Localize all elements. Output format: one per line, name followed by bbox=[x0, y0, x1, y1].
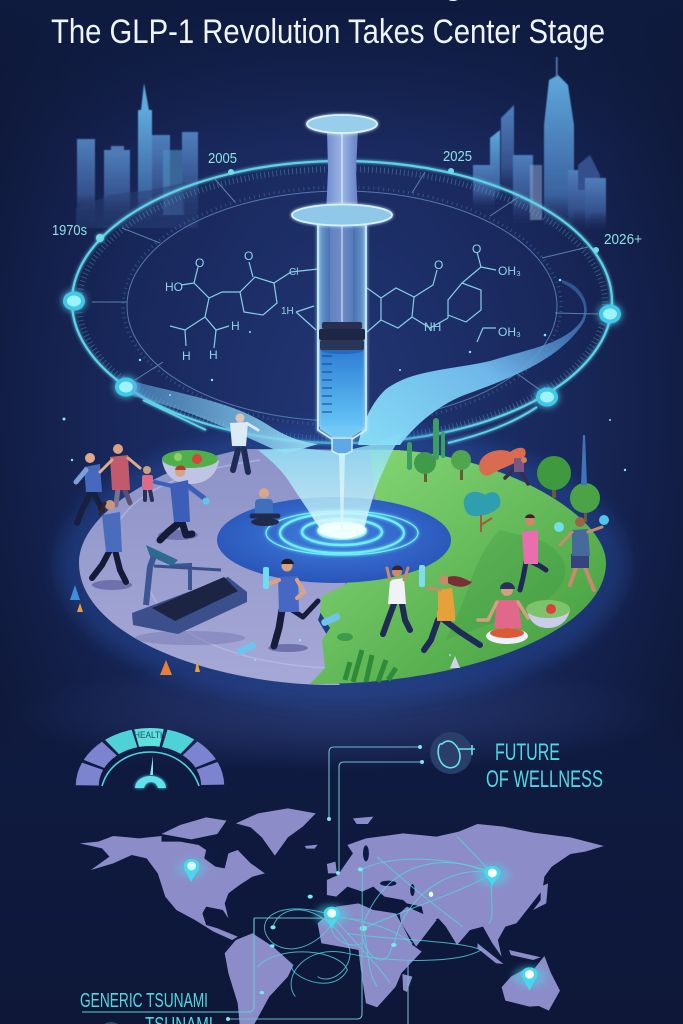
heading: future of wellness: FUTURE bbox=[495, 739, 560, 766]
small figures near liver bbox=[505, 457, 528, 484]
light funnel flowing into the pool bbox=[258, 430, 407, 539]
central pool with glowing rings bbox=[217, 497, 451, 583]
molecule diagram bbox=[165, 242, 521, 363]
title bbox=[51, 0, 605, 51]
molecule diagram: HO bbox=[165, 280, 183, 294]
molecule diagram: H bbox=[231, 319, 240, 333]
liquid ribbon: right bbox=[358, 280, 587, 445]
city skyline: right bbox=[473, 57, 606, 230]
map pins bbox=[177, 858, 546, 991]
molecule diagram: H bbox=[209, 348, 218, 362]
liquid ribbon: left bbox=[132, 381, 537, 454]
syringe rubber stopper bbox=[319, 322, 365, 350]
traffic cones bbox=[70, 585, 460, 675]
timeline year labels: 2005 bbox=[208, 151, 237, 167]
person: woman with wellness orbs bbox=[554, 515, 609, 590]
generic tsunami label: GENERIC TSUNAMI bbox=[80, 990, 208, 1012]
molecule diagram: OH₃ bbox=[498, 264, 521, 278]
person: white top at rear bbox=[230, 414, 258, 472]
world map bbox=[80, 808, 604, 1024]
person: red striped top bbox=[100, 444, 140, 505]
person: center runner bbox=[263, 559, 318, 652]
future of wellness icon bbox=[430, 732, 475, 774]
person: walker in blue with ponytail bbox=[92, 500, 132, 590]
trees and park scenery bbox=[337, 418, 600, 682]
syringe barrel bbox=[318, 222, 366, 439]
timeline year labels: 2025 bbox=[443, 149, 472, 165]
timeline year labels: 1970s bbox=[52, 223, 87, 239]
molecule diagram: O bbox=[244, 249, 253, 263]
molecule diagram: Cl bbox=[289, 267, 298, 278]
title: The GLP-1 Revolution Takes Center Stage bbox=[51, 13, 605, 51]
treadmill bbox=[132, 545, 247, 645]
heading: future of wellness: OF WELLNESS bbox=[486, 766, 603, 793]
health gauge: HEALTH bbox=[134, 730, 166, 741]
people on gray side bbox=[76, 414, 318, 652]
syringe bbox=[292, 115, 392, 530]
molecule diagram: O bbox=[472, 242, 481, 256]
continents bbox=[80, 808, 604, 1024]
salad bowl and plate: right bbox=[486, 600, 570, 644]
scattered sparkles bbox=[62, 279, 626, 661]
molecule diagram: O bbox=[434, 258, 443, 272]
salad bowl: top bbox=[162, 450, 219, 484]
molecule diagram: H bbox=[182, 349, 191, 363]
person: woman with food bbox=[478, 582, 528, 628]
water bottle shoes on the ground bbox=[236, 612, 341, 656]
dial: outer timeline ring bbox=[72, 161, 612, 443]
syringe plunger bbox=[307, 115, 377, 215]
network nodes bbox=[260, 867, 433, 994]
person: jogger with orange top bbox=[424, 575, 480, 650]
person: runner with dumbbell bbox=[155, 466, 210, 540]
liver icons bbox=[464, 448, 526, 532]
syringe finger flange bbox=[292, 204, 392, 226]
generic tsunami label bbox=[80, 990, 213, 1024]
network routes bbox=[257, 837, 492, 997]
person: girl in white top bbox=[383, 565, 425, 634]
person: child in pink bbox=[142, 466, 153, 500]
health gauge bbox=[87, 730, 213, 835]
heading: future of wellness bbox=[486, 739, 603, 793]
timeline year labels: 2026+ bbox=[604, 232, 642, 248]
platform disc: gray (sedentary) half bbox=[57, 425, 627, 705]
city skyline: left bbox=[76, 83, 198, 228]
callout connector lines bbox=[82, 745, 424, 1024]
platform disc: green (active) half bbox=[310, 450, 606, 684]
molecule diagram: NH bbox=[424, 320, 441, 334]
syringe needle bbox=[332, 438, 352, 530]
person: jogger with blue top bbox=[76, 453, 102, 523]
molecule diagram: O bbox=[195, 256, 204, 270]
person: seated meditating bbox=[251, 488, 279, 526]
person: jogger with pink top bbox=[520, 514, 546, 590]
molecule diagram: OH₃ bbox=[498, 325, 521, 339]
inland seas and lakes bbox=[205, 845, 415, 896]
people on green side bbox=[383, 457, 609, 650]
molecule diagram: 1H bbox=[281, 306, 294, 317]
timeline year labels bbox=[52, 149, 642, 248]
timeline nodes bbox=[65, 168, 619, 404]
